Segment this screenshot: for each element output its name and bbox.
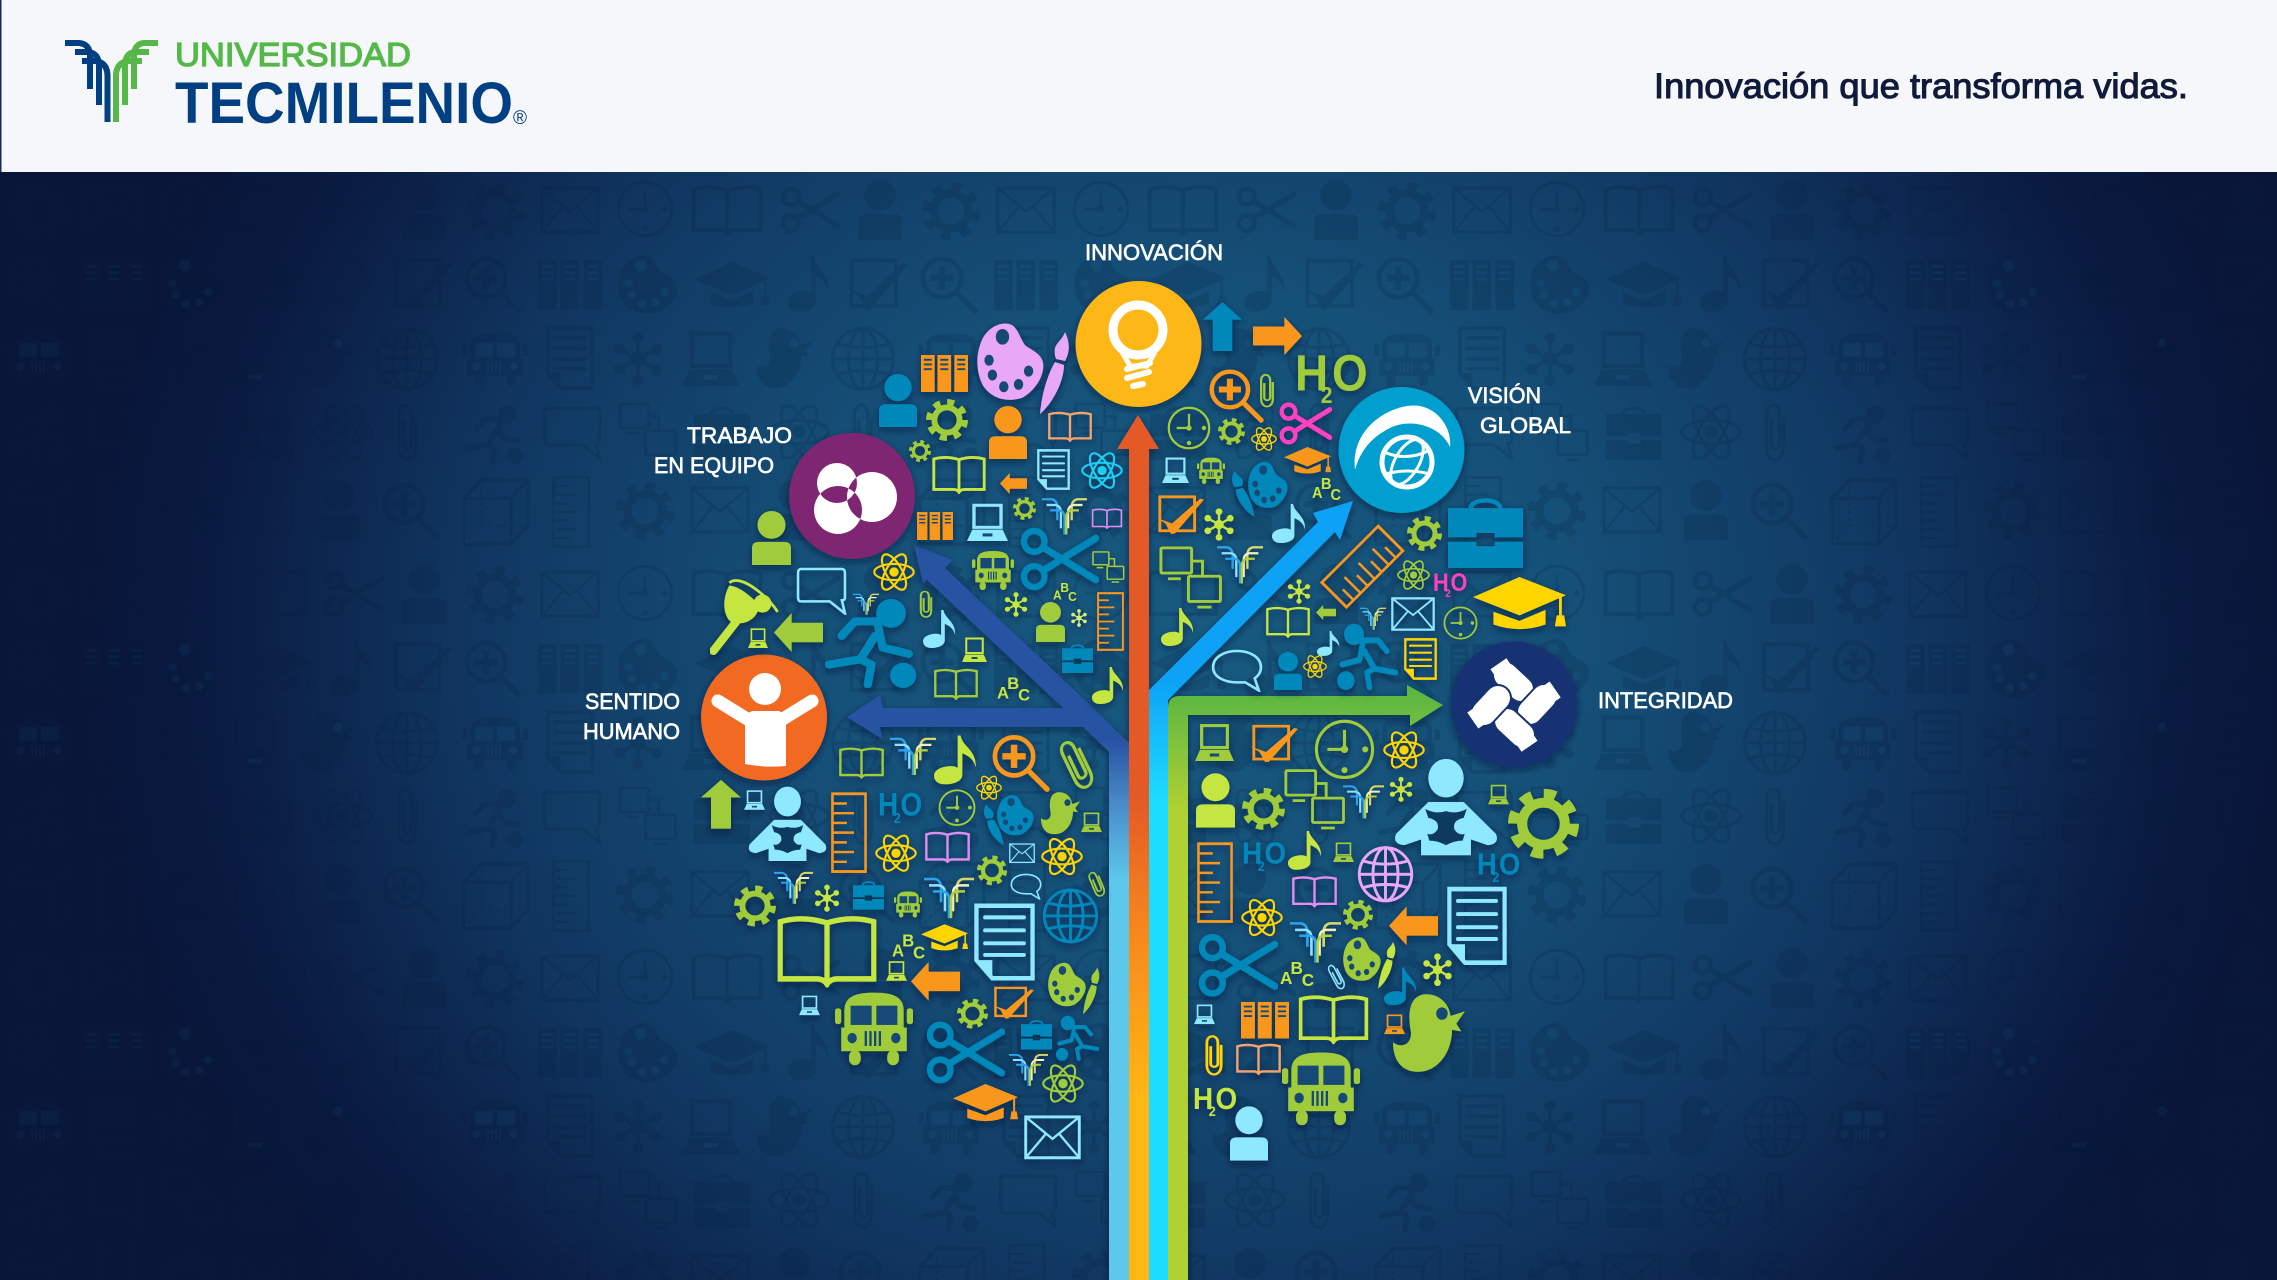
icon: music note <box>923 610 955 648</box>
icon: abc letters: B <box>1060 581 1069 595</box>
icon: h2o <box>1295 345 1368 408</box>
icon: university emblem <box>1042 499 1087 535</box>
icon: atom <box>1242 897 1282 939</box>
icon: gear <box>1220 420 1243 443</box>
icon: palette <box>1048 963 1086 1006</box>
logo emblem <box>65 43 158 122</box>
icon: arrow up <box>701 780 741 829</box>
icon: atom <box>1252 426 1276 452</box>
label: vision: VISIÓN <box>1468 383 1541 408</box>
registered mark: ® <box>513 108 527 129</box>
icon: h2o: H <box>1433 569 1449 596</box>
value: integridad <box>1451 642 1733 768</box>
icon: molecule <box>1390 777 1412 802</box>
icon: university emblem <box>1217 547 1263 584</box>
icon: arrow <box>911 962 960 1001</box>
label: trabajo: TRABAJO <box>687 423 792 448</box>
icon: scissors <box>930 1025 1002 1080</box>
icon: molecule <box>815 885 839 912</box>
label: en equipo: EN EQUIPO <box>654 453 774 478</box>
icon: abc letters <box>892 931 925 962</box>
icon: reader <box>1395 759 1497 855</box>
icon: laptop <box>744 791 765 810</box>
icon: atom <box>1043 1062 1083 1105</box>
header bar <box>0 0 2277 172</box>
icon: h2o <box>1242 836 1286 874</box>
icon: music note <box>1092 667 1123 704</box>
icon: abc letters <box>1280 958 1314 990</box>
icon: atom <box>1082 450 1122 491</box>
icon: paperclip <box>921 591 931 617</box>
icon: ruler <box>832 794 866 872</box>
icon: molecule <box>1423 953 1452 986</box>
icon: envelope <box>1010 844 1034 862</box>
icon: scissors <box>1024 531 1096 587</box>
icon: laptop <box>967 505 1008 541</box>
icon: h2o: O <box>1332 345 1368 402</box>
icon: music note <box>1272 504 1305 543</box>
icon: graduation cap <box>953 1084 1018 1121</box>
icon: atom <box>874 551 914 593</box>
arrow: orange trunk <box>1117 415 1159 1280</box>
icon: arrow <box>1389 906 1438 945</box>
icon: brush <box>1083 968 1099 1014</box>
icon: book <box>840 749 883 777</box>
icon: monitors <box>1286 771 1344 828</box>
icon: university emblem <box>774 873 813 904</box>
icon: gear <box>1245 791 1282 826</box>
icon: book <box>926 833 969 862</box>
icon: h2o: 2 <box>1445 587 1451 600</box>
icon: atom <box>876 832 916 874</box>
icon: music note <box>934 736 976 784</box>
icon: abc letters: B <box>1291 958 1303 978</box>
arrow: dark blue branches and trunk stripe <box>847 545 1129 1280</box>
icon: abc letters: A <box>892 941 904 960</box>
icon: gear <box>737 889 773 923</box>
icon: briefcase <box>1062 645 1093 673</box>
icon: document <box>1038 450 1069 489</box>
icon: speech bubble <box>1011 874 1041 899</box>
icon: person <box>752 511 791 565</box>
value: vision global <box>1338 383 1571 513</box>
icon: checkbox <box>1157 497 1204 534</box>
icon: gear <box>911 442 929 460</box>
icon: abc letters: A <box>1280 968 1292 988</box>
icon: h2o: H <box>1477 848 1497 882</box>
icon: monitors <box>1161 548 1220 607</box>
icon: ruler <box>1322 526 1403 607</box>
icon: brush <box>984 804 1004 845</box>
icon: document <box>976 906 1033 978</box>
icon: palette <box>1248 462 1288 508</box>
icon: abc letters: C <box>1068 590 1077 604</box>
circle: integridad linked hands <box>1451 642 1577 768</box>
icon: molecule <box>1071 609 1087 627</box>
icon: speech bubble <box>1213 651 1261 690</box>
icon: abc letters: C <box>1302 970 1314 990</box>
icon: atom <box>1398 558 1429 592</box>
icon: laptop <box>962 638 987 662</box>
icon: envelope <box>1026 1117 1079 1158</box>
icon: book <box>780 919 874 984</box>
icon: h2o: O <box>1499 848 1520 882</box>
icon: person <box>1196 773 1235 828</box>
icon: h2o: H <box>1295 345 1328 402</box>
icon: h2o: 2 <box>1321 382 1332 408</box>
icon: scissors <box>1202 937 1275 993</box>
icon: atom <box>1042 835 1082 878</box>
logo <box>65 37 527 136</box>
icon: runner <box>829 599 916 688</box>
icon: paperclip <box>1327 963 1346 990</box>
logo word: Universidad: UNIVERSIDAD <box>175 37 411 74</box>
icon: arrow <box>774 613 823 652</box>
icon: h2o <box>1433 569 1467 600</box>
icon: laptop <box>748 629 768 648</box>
icon cluster: lower right <box>1193 721 1573 1161</box>
icon: arrow <box>1316 605 1336 620</box>
label: global: GLOBAL <box>1480 413 1571 438</box>
icon: music note <box>1384 968 1416 1005</box>
icon: magnifier <box>1212 372 1261 420</box>
icon: person <box>1274 652 1302 690</box>
icon: paperclip <box>1059 738 1095 791</box>
icon: laptop <box>1384 1015 1405 1034</box>
icon: book <box>1237 1045 1280 1074</box>
icon: book <box>1049 413 1091 441</box>
icon: university emblem <box>924 879 974 918</box>
icon: person <box>989 406 1027 459</box>
icon: university emblem <box>1343 786 1384 818</box>
icon: monitors <box>1093 552 1124 582</box>
icon: document <box>1449 889 1505 963</box>
icon: university emblem <box>853 594 879 615</box>
icon: palette <box>997 795 1034 835</box>
icon: briefcase <box>1021 1021 1052 1050</box>
icon: bell <box>713 580 778 651</box>
icon: graduation cap <box>921 924 968 950</box>
icon cluster: lower left <box>701 736 1106 1158</box>
icon: scissors <box>1282 405 1330 442</box>
icon: clock <box>1169 408 1209 448</box>
icon cluster: upper left <box>713 323 1124 705</box>
icon: abc letters: C <box>1330 486 1341 504</box>
icon: arrow right <box>1253 317 1302 355</box>
icon: laptop <box>799 996 820 1015</box>
icon: laptop <box>1333 843 1354 862</box>
value: innovacion <box>1076 240 1223 407</box>
icon: ruler <box>1198 844 1232 921</box>
icon: abc letters: A <box>997 684 1009 703</box>
tree arrows <box>847 415 1443 1280</box>
icon: h2o <box>1193 1081 1237 1119</box>
icon: laptop <box>1488 786 1509 804</box>
arrow: green branch and trunk stripe <box>1168 685 1443 1280</box>
arrow: cyan branch and trunk stripe <box>1149 501 1353 1280</box>
icon: ruler <box>1098 593 1123 650</box>
icon: abc letters: B <box>902 931 914 950</box>
icon: gear <box>1015 499 1034 518</box>
label: innovacion: INNOVACIÓN <box>1085 240 1223 265</box>
icon: book <box>1301 997 1366 1042</box>
icon: abc letters: B <box>1007 674 1019 693</box>
icon: gear <box>979 858 1005 883</box>
icon: h2o: 2 <box>1209 1104 1216 1119</box>
circle: trabajo en equipo venn <box>789 433 915 559</box>
icon: book <box>1093 509 1121 528</box>
icon: h2o <box>1477 848 1520 885</box>
icon: atom <box>1384 729 1424 771</box>
circle: innovacion bulb <box>1076 281 1202 407</box>
icon: magnifier <box>995 737 1047 789</box>
value: trabajo en equipo <box>654 423 915 559</box>
icon: book <box>1293 877 1336 906</box>
icon: reader <box>749 787 826 861</box>
icon: clock <box>940 790 974 825</box>
icon: person <box>1230 1106 1268 1161</box>
circle: sentido humano figure <box>701 654 827 780</box>
icon: laptop <box>1194 1005 1215 1024</box>
icon: music note <box>1317 631 1339 656</box>
icon: abc letters: C <box>913 943 925 962</box>
icon: briefcase <box>853 882 884 910</box>
icon: clock <box>1316 721 1373 777</box>
icon: palette <box>977 323 1043 400</box>
icon: bus <box>835 993 913 1065</box>
icon: h2o: O <box>901 788 922 823</box>
icon: molecule <box>1204 508 1234 541</box>
icon: envelope <box>1392 598 1434 630</box>
icon: globe <box>1044 890 1097 942</box>
icon: h2o: H <box>1193 1081 1213 1116</box>
icon: university emblem <box>1360 608 1386 630</box>
icon: h2o: H <box>1242 836 1262 871</box>
value: sentido humano <box>583 654 827 780</box>
icon: bird <box>1393 994 1465 1072</box>
icon: checkbox <box>1251 726 1298 762</box>
label: humano: HUMANO <box>583 719 680 744</box>
icon: clock <box>1444 607 1477 639</box>
icon: person <box>879 374 917 427</box>
icon: h2o: 2 <box>1492 869 1499 885</box>
icon: h2o: 2 <box>1258 858 1265 874</box>
icon: palette <box>1343 937 1381 981</box>
icon: laptop <box>1081 813 1102 832</box>
icon: molecule <box>1005 592 1027 617</box>
icon: briefcase <box>1448 500 1523 568</box>
icon: bus <box>972 551 1014 590</box>
icon: person <box>1036 602 1065 642</box>
icon: molecule <box>1288 579 1310 604</box>
icon: abc letters: B <box>1321 476 1332 493</box>
icon: abc letters <box>997 674 1030 705</box>
icon: atom <box>1304 654 1326 679</box>
icon: paperclip <box>1207 1036 1221 1074</box>
icon: paperclip <box>1088 870 1106 898</box>
icon: paperclip <box>1261 375 1273 406</box>
icon: bus <box>1197 458 1225 484</box>
icon: h2o: 2 <box>894 810 901 826</box>
icon: abc letters: C <box>1018 686 1030 705</box>
icon: books <box>1241 1002 1289 1039</box>
icon: music note <box>1288 831 1321 870</box>
circle: vision global globe <box>1338 387 1464 513</box>
icon: university emblem <box>890 739 936 775</box>
icon: speech bubble <box>798 569 845 613</box>
icon: abc letters: A <box>1053 588 1062 603</box>
icon cluster: upper right <box>1157 302 1566 690</box>
icon: brush <box>1232 471 1254 517</box>
icon: gear <box>959 1001 986 1026</box>
tagline: Innovación que transforma vidas. <box>1654 67 2188 106</box>
icon: books <box>917 512 953 540</box>
icon: abc letters: A <box>1312 485 1323 502</box>
icon: music note <box>1161 608 1193 646</box>
icon: university emblem <box>1009 1055 1048 1086</box>
icon: arrow <box>1000 473 1027 494</box>
label: integridad: INTEGRIDAD <box>1598 688 1733 713</box>
icon: h2o <box>878 788 922 826</box>
icon: abc letters <box>1312 476 1341 504</box>
label: sentido: SENTIDO <box>585 689 680 714</box>
icon: graduation cap <box>1473 577 1566 629</box>
icon: h2o: O <box>1216 1081 1237 1116</box>
icon: runner <box>1056 1016 1097 1061</box>
icon: book <box>934 457 984 492</box>
icon: book <box>1267 608 1309 637</box>
icon: brush <box>1040 332 1069 414</box>
icon: books <box>921 355 968 392</box>
icon: gear <box>1345 902 1371 927</box>
icon: runner <box>1337 624 1396 690</box>
icon: document <box>1405 639 1436 679</box>
icon: arrow up <box>1203 302 1242 351</box>
icon: globe <box>1359 848 1412 901</box>
icon: gear <box>1514 794 1573 853</box>
icon: h2o: O <box>1265 836 1286 871</box>
icon: bird <box>1041 792 1080 834</box>
icon: abc letters <box>1053 581 1077 604</box>
icon: gear <box>1410 519 1439 548</box>
icon: checkbox <box>993 988 1034 1019</box>
icon: book <box>935 670 977 699</box>
icon: laptop <box>1162 459 1189 483</box>
icon: bus <box>894 892 922 918</box>
logo word: Tecmilenio: TECMILENIO <box>175 71 513 136</box>
icon: graduation cap <box>1284 447 1331 474</box>
icon: h2o: H <box>878 788 898 823</box>
icon: laptop <box>886 962 907 981</box>
icon: university emblem <box>1290 923 1341 963</box>
icon: atom <box>977 774 1001 801</box>
icon: gear <box>929 402 965 438</box>
icon: brush <box>1378 942 1395 989</box>
icon: h2o: O <box>1451 569 1467 596</box>
icon: bus <box>1282 1053 1360 1125</box>
icon: laptop <box>1195 726 1234 761</box>
